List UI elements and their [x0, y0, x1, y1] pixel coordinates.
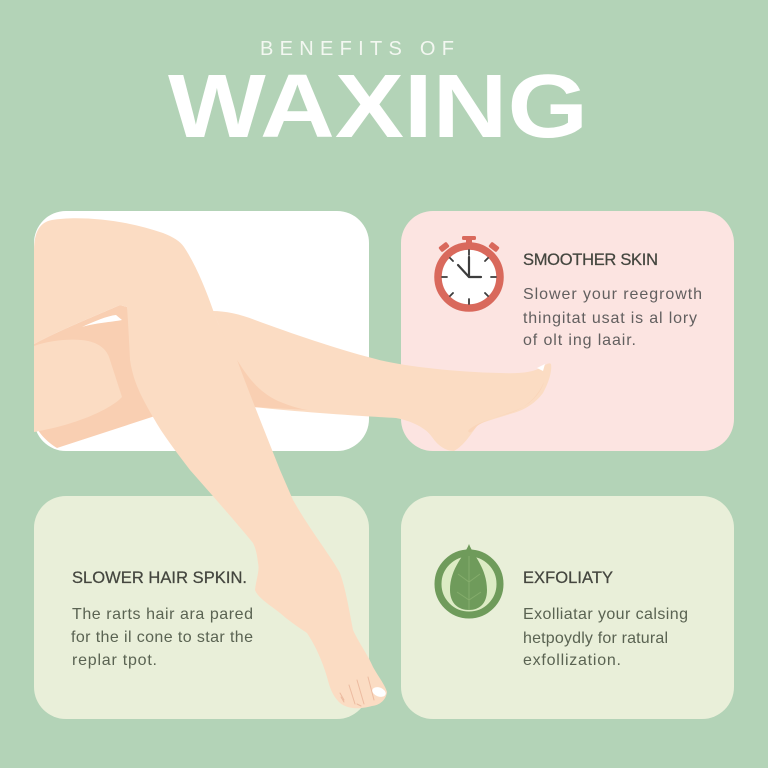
- body text: smoother skin: Slower your reegrowth: [523, 286, 702, 303]
- body text: slower hair: The rarts hair ara pared: [72, 606, 253, 623]
- panel: slower hair: [34, 496, 369, 719]
- toe lines: [340, 677, 374, 706]
- panel: smoother skin: [401, 211, 734, 451]
- icon: stopwatch: [438, 236, 500, 308]
- front leg: [34, 218, 387, 708]
- heading: exfoliaty: EXFOLIATY: [523, 569, 613, 587]
- back thigh highlight: [34, 340, 122, 432]
- title: waxing: WAXING: [168, 57, 588, 157]
- shadow under extended leg: [237, 360, 308, 410]
- body text: exfoliaty: exfollization.: [523, 652, 621, 669]
- body text: smoother skin: of olt ing laair.: [523, 332, 636, 349]
- body text: smoother skin: [523, 286, 702, 349]
- title: benefits of: BENEFITS OF: [260, 38, 454, 60]
- icon: leaf: [438, 544, 500, 615]
- panel: exfoliate: [401, 496, 734, 719]
- body text: smoother skin: thingitat usat is al lory: [523, 310, 697, 327]
- heading: slower hair: SLOWER HAIR SPKIN.: [72, 569, 247, 587]
- body text: slower hair: replar tpot.: [72, 652, 157, 669]
- toenail: bottom foot: [371, 685, 387, 699]
- body text: slower hair: [71, 606, 253, 669]
- body text: exfoliaty: hetpoydly for ratural: [523, 630, 668, 647]
- foot arch shadow: [468, 382, 544, 432]
- back thigh shaded: [34, 305, 155, 448]
- body text: exfoliaty: [523, 606, 688, 669]
- white gap: [82, 315, 122, 327]
- body text: exfoliaty: Exolliatar your calsing: [523, 606, 688, 623]
- heading: smoother skin: SMOOTHER SKIN: [523, 251, 658, 269]
- panel: illustration background: [34, 211, 369, 451]
- title: [168, 38, 588, 157]
- toenail: top foot: [537, 364, 545, 371]
- extended leg and foot: [213, 311, 551, 451]
- body text: slower hair: for the il cone to star the: [71, 629, 253, 646]
- illustration: crossed legs: [34, 218, 551, 708]
